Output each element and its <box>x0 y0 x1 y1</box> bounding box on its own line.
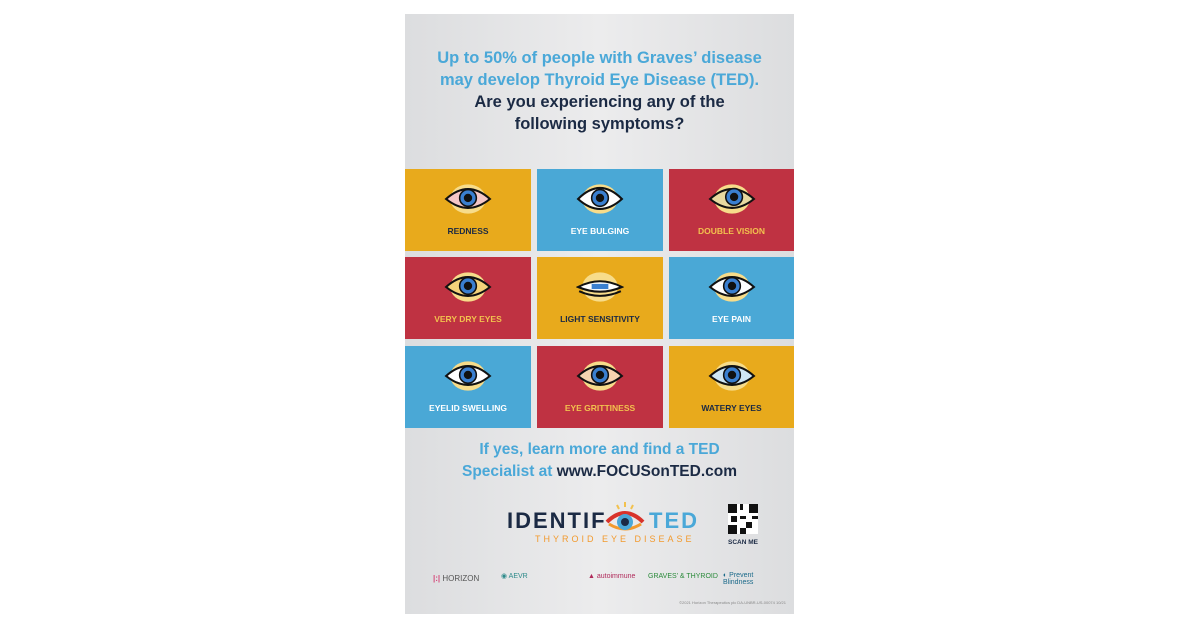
partner logos: ◉ AEVR <box>501 573 528 580</box>
tile: eye pain: EYE PAIN <box>712 314 751 324</box>
call to action: If yes, learn more and find a TED <box>479 441 720 458</box>
heading navy: Are you experiencing any of the <box>474 93 725 111</box>
tile: eye grittiness <box>537 346 663 428</box>
partner logos: GRAVES’ & THYROID <box>648 573 718 580</box>
heading navy <box>474 93 725 133</box>
tile: double vision <box>669 169 794 251</box>
logo: identify TED: TED <box>649 508 699 533</box>
partner logos: ◐ Prevent Blindness <box>723 572 753 586</box>
partner logos: ▲ autoimmune <box>588 573 635 580</box>
tile: eye bulging: EYE BULGING <box>571 226 629 236</box>
call to action <box>462 441 737 480</box>
tile: redness <box>405 169 531 251</box>
copyright: ©2021 Horizon Therapeutics plc DA-UNBR-US-00074 10/21 <box>679 600 786 605</box>
partner logos: |:| HORIZON <box>433 574 479 583</box>
tile: eyelid swelling <box>405 346 531 428</box>
tile: light sensitivity: LIGHT SENSITIVITY <box>560 314 640 324</box>
heading blue: may develop Thyroid Eye Disease (TED). <box>440 71 759 89</box>
heading blue <box>437 49 762 89</box>
call to action: Specialist at www.FOCUSonTED.com <box>462 463 737 480</box>
tile: redness: REDNESS <box>447 226 489 236</box>
tile: eye bulging <box>537 169 663 251</box>
tile: watery eyes <box>669 346 794 428</box>
logo: identify TED <box>507 502 699 544</box>
logo: identify TED: IDENTIF <box>507 508 607 533</box>
qr code <box>728 504 758 546</box>
partner logos <box>433 572 754 586</box>
tile: very dry eyes <box>405 257 531 339</box>
tile: light sensitivity <box>537 257 663 339</box>
tile: watery eyes: WATERY EYES <box>701 403 762 413</box>
tile: very dry eyes: VERY DRY EYES <box>434 314 502 324</box>
poster <box>405 14 794 614</box>
qr code: SCAN ME <box>728 539 758 546</box>
tile: eye grittiness: EYE GRITTINESS <box>565 403 635 413</box>
heading blue: Up to 50% of people with Graves’ disease <box>437 49 762 67</box>
tile: eye pain <box>669 257 794 339</box>
tile: double vision: DOUBLE VISION <box>698 226 765 236</box>
logo: identify TED: THYROID EYE DISEASE <box>535 534 695 544</box>
heading navy: following symptoms? <box>515 115 684 133</box>
tile: eyelid swelling: EYELID SWELLING <box>429 403 507 413</box>
